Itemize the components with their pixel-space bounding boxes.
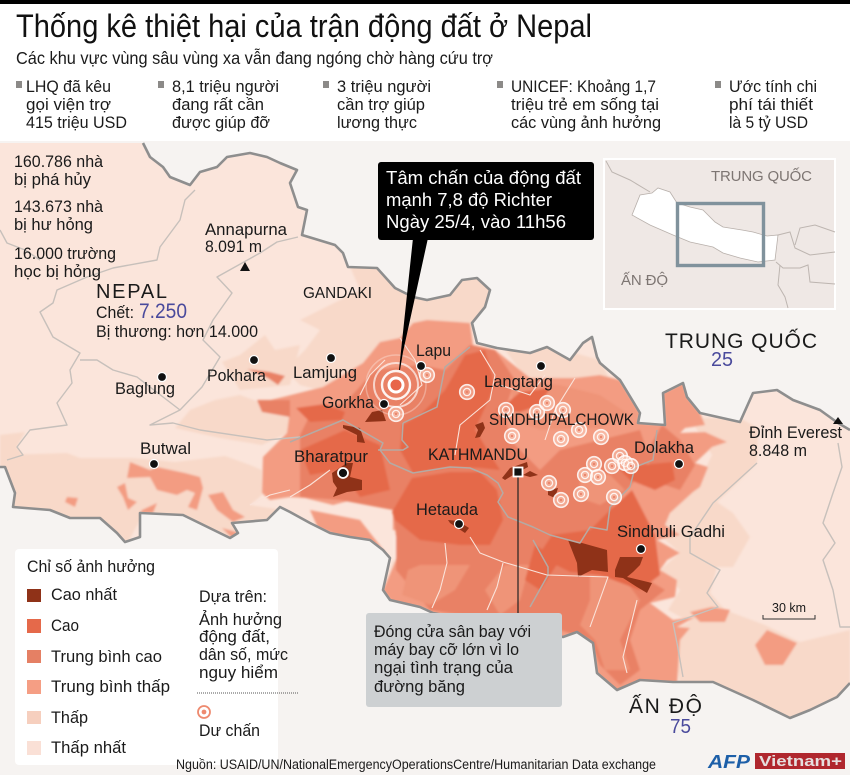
damage statistics: bị phá hủy — [14, 170, 91, 189]
India death toll: ẤN ĐỘ — [629, 695, 702, 718]
callout: airport closure: ngại tình trạng của — [374, 658, 514, 677]
callout: epicentre: Tâm chấn của động đất — [386, 168, 581, 188]
callout: epicentre — [378, 162, 594, 370]
medium-high areas — [247, 345, 695, 685]
place labels: Pokhara — [207, 366, 266, 385]
stat: UNICEF children: các vùng ảnh hưởng — [511, 113, 661, 132]
lighter pockets — [402, 380, 640, 670]
callout: epicentre: mạnh 7,8 độ Richter — [386, 190, 552, 210]
country border — [143, 143, 850, 430]
scale bar — [763, 600, 815, 619]
damage statistics: học bị hỏng — [14, 262, 101, 281]
Annapurna peak — [205, 220, 288, 271]
legend panel: Chỉ số ảnh hưởng — [27, 557, 155, 576]
soft colour fills — [0, 262, 850, 722]
highest impact areas — [332, 410, 652, 593]
inset locator map: TRUNG QUỐC — [711, 167, 812, 185]
callout: airport closure: Đóng cửa sân bay với — [374, 622, 531, 641]
damage statistics: 16.000 trường — [14, 244, 116, 263]
inset locator map — [604, 159, 835, 309]
legend panel: Dựa trên: — [199, 587, 267, 606]
place labels: Butwal — [140, 439, 191, 458]
stat: UN appeal — [16, 77, 127, 132]
legend panel: Thấp — [51, 708, 88, 727]
top black bar — [0, 0, 850, 4]
place labels: KATHMANDU — [428, 445, 528, 464]
legend panel — [15, 549, 298, 765]
damage statistics: 160.786 nhà — [14, 152, 104, 171]
India death toll — [629, 695, 702, 738]
Annapurna peak: 8.091 m — [205, 237, 262, 256]
legend panel: Trung bình cao — [51, 647, 162, 666]
stat: people needing help: được giúp đỡ — [172, 113, 270, 132]
callout: airport closure: đường băng — [374, 677, 465, 696]
southern border — [0, 467, 850, 718]
legend panel: nguy hiểm — [199, 663, 278, 682]
damage statistics — [14, 152, 116, 281]
header background — [0, 0, 850, 141]
Kathmandu marker and leader line — [514, 468, 522, 614]
legend panel: Ảnh hưởng — [199, 610, 282, 629]
India death toll: 75 — [670, 716, 691, 738]
place labels: Lapu — [416, 341, 451, 360]
stat: reconstruction cost: Ước tính chi — [729, 77, 817, 96]
stat: UNICEF children: triệu trẻ em sống tại — [511, 95, 659, 114]
Everest peak — [749, 417, 843, 460]
place labels: GANDAKI — [303, 285, 372, 302]
stat: UN appeal: LHQ đã kêu — [26, 77, 111, 96]
epicentre rings — [366, 355, 426, 415]
Nepal totals: 7.250 — [139, 300, 187, 323]
place labels: Gorkha — [322, 393, 375, 412]
stat: people needing help — [158, 77, 279, 132]
title: Thống kê thiệt hại của trận động đất ở Nepal — [16, 8, 592, 44]
callout: airport closure — [366, 613, 562, 707]
lowest impact patch south of Bharatpur — [394, 536, 398, 559]
place labels: Langtang — [484, 372, 553, 391]
Annapurna peak: Annapurna — [205, 220, 288, 239]
China death toll: TRUNG QUỐC — [665, 329, 817, 353]
place labels: Bharatpur — [294, 447, 368, 466]
damage statistics: bị hư hỏng — [14, 215, 93, 234]
inset locator map: ẤN ĐỘ — [621, 272, 668, 289]
place labels: Hetauda — [416, 500, 479, 519]
source: Nguồn: USAID/UN/NationalEmergencyOperationsCentre/Humanitarian Data exchange — [176, 757, 656, 772]
high impact areas — [296, 350, 675, 590]
callout: airport closure: máy bay cỡ lớn vì lo — [374, 640, 519, 659]
logo: Vietnam+: Vietnam+ — [759, 753, 842, 770]
callout: epicentre: Ngày 25/4, vào 11h56 — [386, 212, 566, 232]
stat: reconstruction cost: phí tái thiết — [729, 95, 813, 114]
Nepal totals: Bị thương: hơn 14.000 — [96, 322, 258, 341]
stat: UN appeal: 415 triệu USD — [26, 113, 127, 132]
place labels — [115, 285, 725, 554]
place labels: Sindhuli Gadhi — [617, 522, 725, 541]
China death toll: 25 — [711, 349, 733, 371]
China death toll — [665, 329, 817, 371]
legend panel: Cao nhất — [51, 585, 117, 604]
Nepal totals: Chết: — [96, 303, 134, 322]
legend panel: Trung bình thấp — [51, 677, 170, 696]
scale bar: 30 km — [772, 600, 806, 615]
stat: reconstruction cost — [715, 77, 817, 132]
stat: food aid: cần trợ giúp — [337, 95, 425, 114]
Everest peak: 8.848 m — [749, 441, 807, 460]
stat: UNICEF children: UNICEF: Khoảng 1,7 — [511, 77, 656, 96]
legend panel: dân số, mức — [199, 645, 288, 664]
logo: AFP: AFP — [707, 752, 751, 772]
damage statistics: 143.673 nhà — [14, 197, 104, 216]
place labels: SINDHUPALCHOWK — [489, 410, 635, 429]
aftershock markers — [389, 368, 638, 507]
place labels: Dolakha — [634, 438, 695, 457]
stat: UN appeal: gọi viện trợ — [26, 95, 111, 114]
stat: people needing help: đang rất cần — [172, 95, 264, 114]
stat: UNICEF children — [497, 77, 661, 132]
stat: food aid: 3 triệu người — [337, 77, 431, 96]
legend panel: Cao — [51, 616, 79, 635]
legend panel: Dư chấn — [199, 721, 260, 740]
low impact areas — [0, 262, 850, 722]
stat: reconstruction cost: là 5 tỷ USD — [729, 113, 808, 132]
legend panel: Thấp nhất — [51, 738, 126, 757]
legend panel: động đất, — [199, 627, 270, 646]
subtitle: Các khu vực vùng sâu vùng xa vẫn đang ngóng chờ hàng cứu trợ — [16, 47, 493, 68]
stat: food aid: lương thực — [337, 113, 417, 132]
Everest peak: Đỉnh Everest — [749, 423, 842, 442]
district and zone lines — [0, 190, 850, 677]
place labels: Lamjung — [293, 363, 357, 382]
stat: food aid — [323, 77, 431, 132]
place labels: Baglung — [115, 379, 175, 398]
Nepal totals: NEPAL — [96, 281, 167, 303]
medium-low areas — [65, 320, 797, 695]
stat: people needing help: 8,1 triệu người — [172, 77, 279, 96]
Nepal totals — [96, 281, 258, 341]
